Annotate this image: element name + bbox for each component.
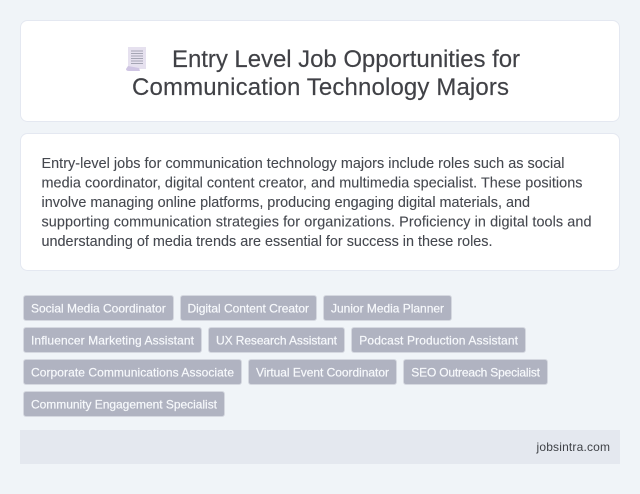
text block: description [42,156,592,250]
text block: description: media coordinator, digital content creator, and multimedia specialist. These positions [42,176,582,192]
footer source text: jobsintra.com [536,440,610,454]
tag: Corporate Communications Associate [24,360,242,384]
tag: Podcast Production Assistant [352,328,526,352]
text block: description: involve managing online platforms, producing engaging digital materials, and [42,195,530,211]
tag: Social Media Coordinator [24,296,174,320]
icon: document scroll [126,47,146,71]
tag: Podcast Production Assistant: Podcast Production Assistant [359,333,519,347]
panel: title card [20,20,620,122]
tag: UX Research Assistant: UX Research Assistant [216,333,338,347]
tag: SEO Outreach Specialist: SEO Outreach Specialist [411,365,541,379]
tag: Virtual Event Coordinator [248,360,396,384]
tag: Influencer Marketing Assistant: Influencer Marketing Assistant [31,333,195,347]
text block: description: Entry-level jobs for communication technology majors include roles such as social [42,156,564,172]
tag: Community Engagement Specialist: Community Engagement Specialist [31,397,218,411]
tag: Corporate Communications Associate: Corporate Communications Associate [31,365,234,379]
title: Entry Level Job Opportunities for [172,46,520,73]
text block: description: supporting communication strategies for organizations. Proficiency in digital tools and [42,214,592,230]
tag: Virtual Event Coordinator: Virtual Event Coordinator [256,365,389,379]
title [132,46,520,101]
tag: UX Research Assistant [208,328,344,352]
panel: description card [20,134,620,270]
text block: description: understanding of media trends are essential for success in these roles. [42,234,492,250]
tag: Social Media Coordinator: Social Media Coordinator [31,301,166,315]
tag: Junior Media Planner [324,296,452,320]
tag: Digital Content Creator [180,296,316,320]
tag: Junior Media Planner: Junior Media Planner [331,301,444,315]
footer [20,430,620,464]
tag: Digital Content Creator: Digital Content Creator [188,301,309,315]
panel: job tags [24,296,548,416]
title: Communication Technology Majors [132,74,509,101]
tag: SEO Outreach Specialist [404,360,548,384]
tag: Influencer Marketing Assistant [24,328,202,352]
tag: Community Engagement Specialist [24,392,224,416]
